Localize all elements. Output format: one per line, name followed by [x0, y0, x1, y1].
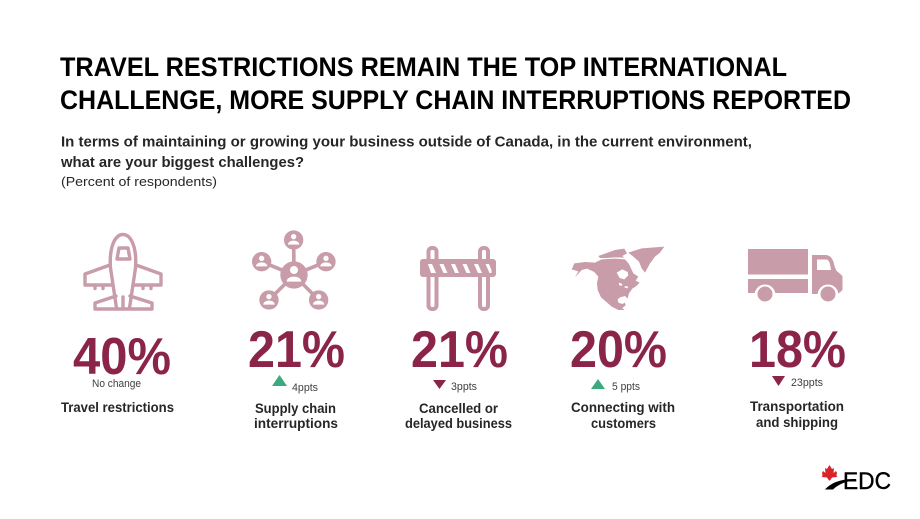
change: 3ppts: 3ppts	[451, 381, 477, 393]
arrow: down	[433, 380, 446, 389]
label: connecting with customers: Connecting with	[571, 399, 675, 415]
subtitle question: what are your biggest challenges?	[60, 155, 304, 171]
label: connecting with customers	[571, 399, 675, 431]
icon: maple leaf	[822, 465, 837, 480]
label: transportation and shipping: and shipping	[756, 414, 838, 430]
change: 23ppts: 23ppts	[791, 377, 823, 389]
change: 5 ppts: 5 ppts	[612, 381, 640, 393]
stat: 21%: 21%	[411, 321, 508, 379]
label: supply chain interruptions: Supply chain	[255, 400, 336, 416]
title: CHALLENGE, MORE SUPPLY CHAIN INTERRUPTIONS REPORTED	[60, 85, 851, 115]
column: supply chain interruptions	[248, 230, 345, 431]
label: cancelled or delayed business	[405, 400, 512, 431]
column: transportation and shipping	[748, 249, 846, 430]
column: cancelled or delayed business	[405, 248, 512, 431]
subtitle question	[60, 134, 752, 189]
label: transportation and shipping: Transportation	[750, 398, 844, 414]
label: supply chain interruptions: interruptions	[254, 415, 338, 431]
stat: 40%: 40%	[73, 328, 171, 386]
stat: 18%: 18%	[749, 321, 846, 379]
icon: map of North America	[572, 247, 664, 310]
column: connecting with customers	[570, 247, 675, 431]
logo: EDC	[822, 465, 891, 495]
stat: 20%: 20%	[570, 321, 667, 379]
icon: road barrier	[420, 248, 496, 309]
arrow: up	[272, 375, 287, 386]
change: no change: No change	[92, 378, 141, 390]
icon: swoosh	[825, 479, 856, 490]
column: travel restrictions	[61, 234, 174, 415]
icon: airplane	[85, 234, 161, 309]
stat: 21%: 21%	[248, 321, 345, 379]
label: travel restrictions: Travel restrictions	[61, 399, 174, 415]
title: TRAVEL RESTRICTIONS REMAIN THE TOP INTERNATIONAL	[60, 52, 787, 82]
label: connecting with customers: customers	[591, 415, 656, 431]
subtitle question: (Percent of respondents)	[61, 174, 217, 189]
icon: truck	[748, 249, 842, 306]
arrow: up	[591, 379, 605, 389]
icon: people network	[252, 230, 336, 310]
label: cancelled or delayed business: Cancelled or	[419, 400, 499, 416]
label: transportation and shipping	[750, 398, 844, 430]
title	[60, 52, 851, 115]
label: cancelled or delayed business: delayed business	[405, 415, 512, 431]
label: supply chain interruptions	[254, 400, 338, 431]
subtitle question: In terms of maintaining or growing your business outside of Canada, in the current environment,	[61, 134, 752, 150]
logo: EDC: EDC	[843, 468, 891, 495]
arrow: down	[772, 376, 785, 386]
change: 4ppts: 4ppts	[292, 382, 318, 394]
